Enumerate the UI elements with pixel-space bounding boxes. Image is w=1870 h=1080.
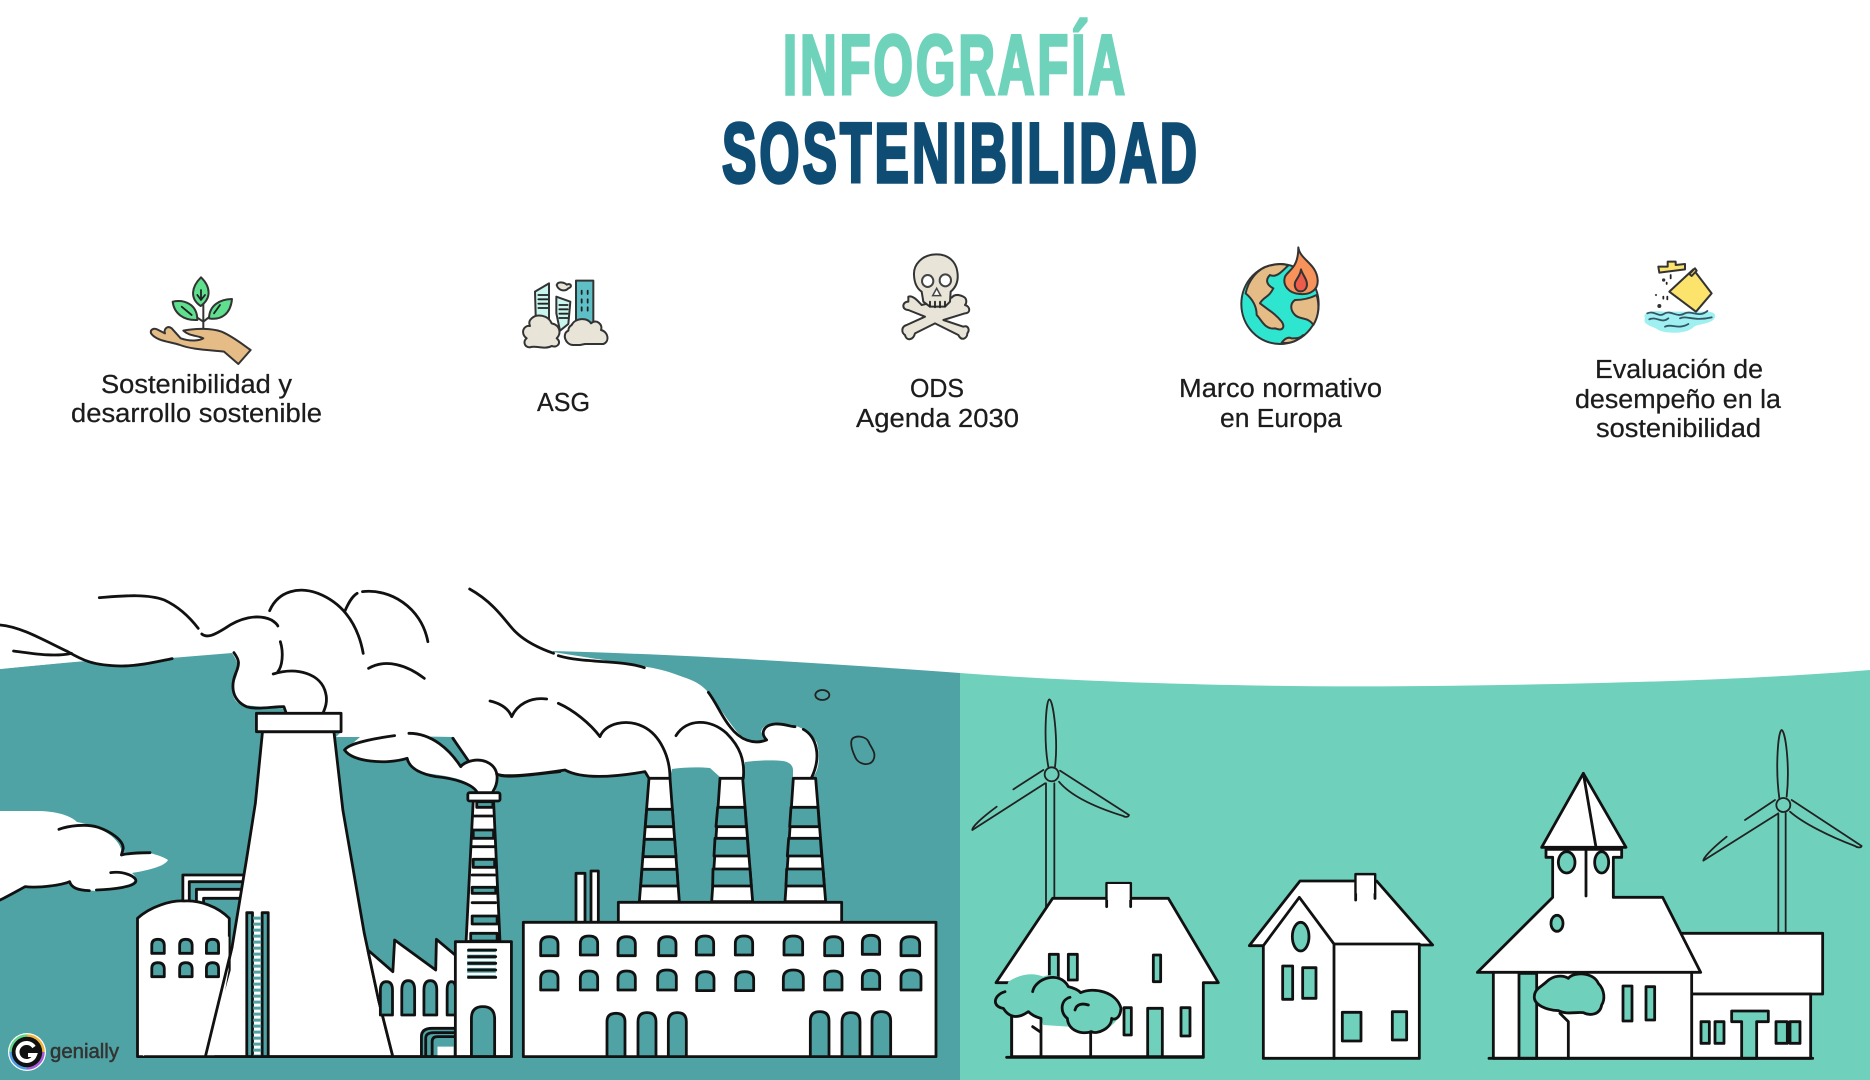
left low cloud — [0, 811, 168, 900]
smoke cloud fill — [0, 600, 819, 792]
icon: hand holding a plant — [151, 277, 251, 364]
lower windows — [541, 970, 921, 991]
annex building — [1680, 933, 1823, 1058]
label: ods agenda 2030: ODS — [910, 375, 964, 403]
chimney two — [712, 778, 753, 902]
title — [722, 18, 1200, 200]
illustration: factory with smoke — [0, 589, 936, 1057]
house one — [995, 883, 1218, 1057]
wind turbine left — [972, 699, 1129, 907]
label: evaluación de desempeño en la sostenibilidad: Evaluación de — [1595, 356, 1763, 384]
icon: city in clouds — [523, 281, 608, 348]
item: ods agenda 2030 — [856, 254, 1019, 433]
saw-tooth shed — [368, 939, 457, 1057]
left factory block — [137, 713, 511, 1057]
cooling tower — [205, 713, 393, 1057]
storage tank — [137, 901, 232, 1057]
label: evaluación de desempeño en la sostenibilidad — [1575, 356, 1782, 443]
chimney one — [639, 778, 679, 902]
upper windows — [541, 935, 920, 956]
tall striped chimney — [466, 793, 500, 942]
label: sostenibilidad y desarrollo sostenible: desarrollo sostenible — [71, 400, 322, 428]
smoke outlines — [0, 589, 560, 792]
background band: polluted side — [0, 650, 960, 1080]
house two — [1249, 874, 1433, 1058]
icon: bucket spilling in water — [1644, 262, 1715, 333]
small vent pipes — [576, 871, 598, 922]
icon: burning earth — [1241, 247, 1319, 344]
label: evaluación de desempeño en la sostenibilidad: desempeño en la — [1575, 386, 1782, 414]
title line: sostenibilidad: SOSTENIBILIDAD — [722, 106, 1200, 200]
item: sostenibilidad y desarrollo sostenible — [71, 277, 322, 428]
cloud outlines — [0, 825, 150, 900]
wind turbine right — [1703, 730, 1862, 933]
label: marco normativo en europa — [1179, 375, 1382, 433]
chimney platform — [618, 902, 842, 922]
icon: genially badge — [8, 1033, 46, 1071]
label: ods agenda 2030: Agenda 2030 — [856, 405, 1019, 433]
main factory block — [523, 778, 936, 1057]
pipes behind tank — [183, 875, 244, 902]
illustration: sustainable village — [972, 699, 1862, 1058]
left houses and turbine — [972, 699, 1433, 1058]
item: marco normativo en europa — [1179, 247, 1382, 433]
label: sostenibilidad y desarrollo sostenible: Sostenibilidad y — [101, 371, 292, 399]
church — [1477, 773, 1701, 1058]
label: ods agenda 2030 — [856, 375, 1019, 433]
label: asg: ASG — [537, 389, 590, 417]
main building — [523, 922, 936, 1057]
title line: infografía: INFOGRAFÍA — [783, 18, 1128, 112]
icon: skull and crossbones — [902, 254, 969, 339]
label: marco normativo en europa: en Europa — [1220, 405, 1343, 433]
genially logo — [8, 1033, 119, 1071]
chimney three — [785, 778, 826, 902]
trees — [995, 974, 1121, 1057]
tower ladder — [247, 913, 268, 1057]
label: evaluación de desempeño en la sostenibilidad: sostenibilidad — [1596, 415, 1761, 443]
label: sostenibilidad y desarrollo sostenible — [71, 371, 322, 428]
item: evaluación de desempeño — [1575, 262, 1782, 443]
church tree — [1534, 974, 1604, 1058]
label: marco normativo en europa: Marco normativo — [1179, 375, 1382, 403]
background band: sustainable side — [960, 670, 1870, 1080]
item: asg — [523, 281, 608, 417]
church and turbine — [1477, 730, 1862, 1058]
arched doors — [607, 1012, 891, 1057]
chimney base house — [455, 942, 511, 1057]
wordmark: genially — [50, 1041, 119, 1063]
teal wedge between smoke plumes — [425, 736, 468, 767]
